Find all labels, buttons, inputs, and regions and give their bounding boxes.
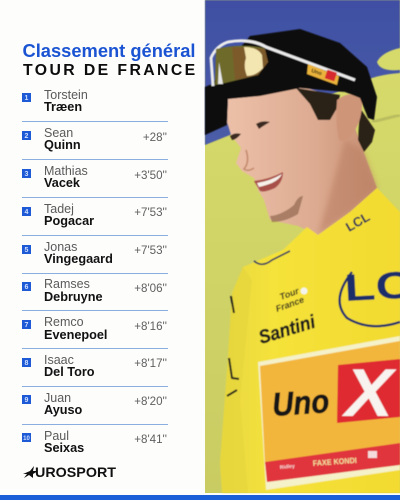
LCL chest logo	[340, 264, 400, 326]
row 9: 9	[25, 397, 29, 404]
row 3: Vacek	[44, 176, 81, 190]
row 4: Pogacar	[44, 214, 94, 228]
sponsor panel: X	[341, 355, 397, 431]
bottom blue bar	[0, 495, 400, 500]
row 7	[22, 315, 167, 342]
sponsor panel	[258, 336, 400, 490]
row 9	[22, 391, 167, 417]
rider cap	[205, 29, 377, 135]
row 1: Træen	[44, 100, 82, 114]
row 1: 1	[25, 95, 29, 102]
row 3	[22, 164, 167, 190]
rider neck and face	[227, 86, 377, 235]
Tour de France logo: France	[274, 294, 305, 314]
LCL collar logo: LCL	[343, 209, 372, 235]
row 5: 5	[25, 247, 29, 254]
row 9: Ayuso	[44, 403, 83, 417]
row 3: +3'50''	[134, 169, 167, 182]
rider eyes	[230, 121, 270, 140]
Tour de France logo: Tour	[278, 286, 301, 302]
row 9: Juan	[44, 391, 71, 405]
row 5: Jonas	[44, 240, 77, 254]
Tour de France logo	[274, 286, 308, 314]
Eurosport logo: UROSPORT	[35, 464, 116, 480]
subtitle: Tour de France: TOUR DE FRANCE	[23, 62, 198, 79]
row 8: 8	[25, 360, 29, 367]
row 2: +28''	[143, 131, 167, 144]
row 7: 7	[25, 322, 29, 329]
sunglasses on cap	[211, 41, 355, 86]
row 3: Mathias	[44, 164, 88, 178]
row 6	[22, 277, 167, 304]
row 2: Sean	[44, 126, 73, 140]
left sleeve marks	[227, 296, 239, 396]
row 3: 3	[25, 171, 29, 178]
row 6: Ramses	[44, 277, 90, 291]
cap badge	[307, 64, 339, 85]
red X block	[337, 359, 400, 423]
row 10: Seixas	[44, 441, 84, 455]
row 7: Evenepoel	[44, 328, 107, 342]
Uno logo: Uno	[271, 382, 330, 423]
Faxe Kondi label: FAXE KONDI	[313, 456, 357, 468]
title: Classement général: Classement général	[22, 40, 196, 61]
row 7: Remco	[44, 315, 84, 329]
row 9: +8'20''	[134, 395, 167, 408]
row 5: +7'53''	[134, 244, 167, 257]
rider beard	[270, 196, 303, 222]
collar seam	[254, 251, 290, 264]
Santini logo: Santini	[256, 312, 319, 349]
sleeve shade	[220, 267, 252, 493]
rider nose shadow	[244, 150, 254, 170]
row 1	[22, 88, 88, 114]
panel: rider photo	[205, 0, 400, 493]
small sponsors: Ridley	[280, 463, 295, 471]
row 4	[22, 202, 167, 228]
row 5	[22, 240, 167, 266]
row 6: Debruyne	[44, 290, 103, 304]
row 6: +8'06''	[134, 282, 167, 295]
row 7: +8'16''	[134, 320, 167, 333]
row 1: Torstein	[44, 88, 88, 102]
row 10: Paul	[44, 429, 69, 443]
row 8: +8'17''	[134, 357, 167, 370]
row 2	[22, 126, 167, 152]
LCL chest logo: LC	[343, 264, 400, 310]
row 2: Quinn	[44, 138, 81, 152]
rider ear	[336, 94, 362, 141]
row 8	[22, 353, 167, 379]
row 10: +8'41''	[134, 433, 167, 446]
row 10	[22, 429, 167, 455]
row 4: +7'53''	[134, 206, 167, 219]
row 8: Isaac	[44, 353, 74, 367]
yellow jersey	[220, 188, 400, 493]
rider hair	[296, 88, 375, 152]
row 6: 6	[25, 284, 29, 291]
row 10: 10	[23, 436, 30, 442]
cap badge: Uno	[310, 68, 323, 77]
row 8: Del Toro	[44, 365, 95, 379]
row 2: 2	[25, 133, 29, 140]
row 4: Tadej	[44, 202, 74, 216]
neck shading	[318, 140, 377, 235]
rider smile	[254, 172, 283, 192]
row 4: 4	[25, 209, 29, 216]
row 5: Vingegaard	[44, 252, 113, 266]
